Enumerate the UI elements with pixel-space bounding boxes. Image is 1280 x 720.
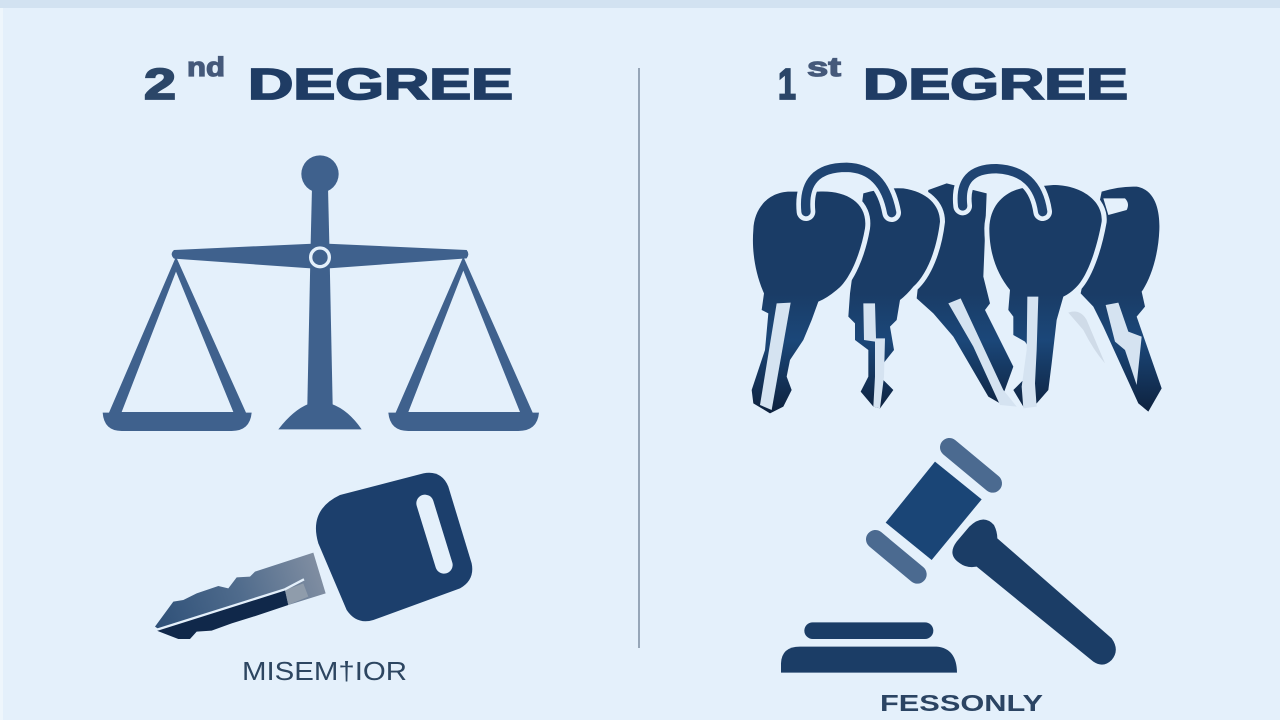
heading: 1st degree: st bbox=[807, 52, 841, 82]
gavel head bbox=[886, 462, 982, 560]
center divider bbox=[638, 68, 640, 648]
scale pole bbox=[307, 173, 333, 405]
key head bbox=[316, 473, 472, 621]
gavel top band bbox=[949, 447, 993, 483]
sound block top bbox=[804, 622, 933, 639]
key ring 1 bbox=[806, 167, 892, 213]
label: misemeanor: MISEM†IOR bbox=[242, 656, 407, 686]
key 3 bbox=[917, 183, 1017, 407]
heading: 1st degree: 1 bbox=[778, 60, 796, 109]
pivot ring bbox=[311, 248, 329, 267]
key 2 bbox=[848, 188, 940, 408]
heading: 2nd degree: 2 bbox=[144, 60, 176, 109]
icon: bunch of keys bbox=[752, 167, 1162, 413]
heading: 1st degree bbox=[778, 52, 1128, 109]
heading: 2nd degree: nd bbox=[187, 52, 225, 82]
sound block base bbox=[781, 647, 957, 673]
icon: balance scales bbox=[103, 155, 539, 431]
label: felony: FESSONLY bbox=[880, 690, 1043, 716]
key 1 bbox=[752, 192, 865, 413]
icon: gavel and sound block bbox=[781, 447, 1116, 673]
key 4 bbox=[989, 185, 1105, 408]
heading: 2nd degree: DEGREE bbox=[248, 60, 513, 109]
right pan bbox=[388, 257, 539, 431]
heading: 2nd degree bbox=[144, 52, 513, 109]
left edge highlight bbox=[0, 8, 3, 720]
key blade lower bbox=[157, 590, 288, 639]
left column: 2nd degree bbox=[103, 52, 539, 686]
left pan bbox=[103, 257, 252, 431]
gavel handle bbox=[952, 520, 1116, 665]
icon: single car key bbox=[155, 473, 472, 639]
key blade upper bbox=[155, 553, 326, 630]
right column: 1st degree bbox=[752, 52, 1162, 716]
gavel bottom band bbox=[875, 539, 917, 574]
top band bbox=[0, 0, 1280, 8]
key 5 bbox=[1081, 187, 1162, 412]
scale base bbox=[278, 404, 362, 429]
heading: 1st degree: DEGREE bbox=[863, 60, 1128, 109]
key ring 2 bbox=[962, 169, 1043, 212]
key slot bbox=[425, 503, 444, 565]
scale beam bbox=[172, 243, 468, 269]
